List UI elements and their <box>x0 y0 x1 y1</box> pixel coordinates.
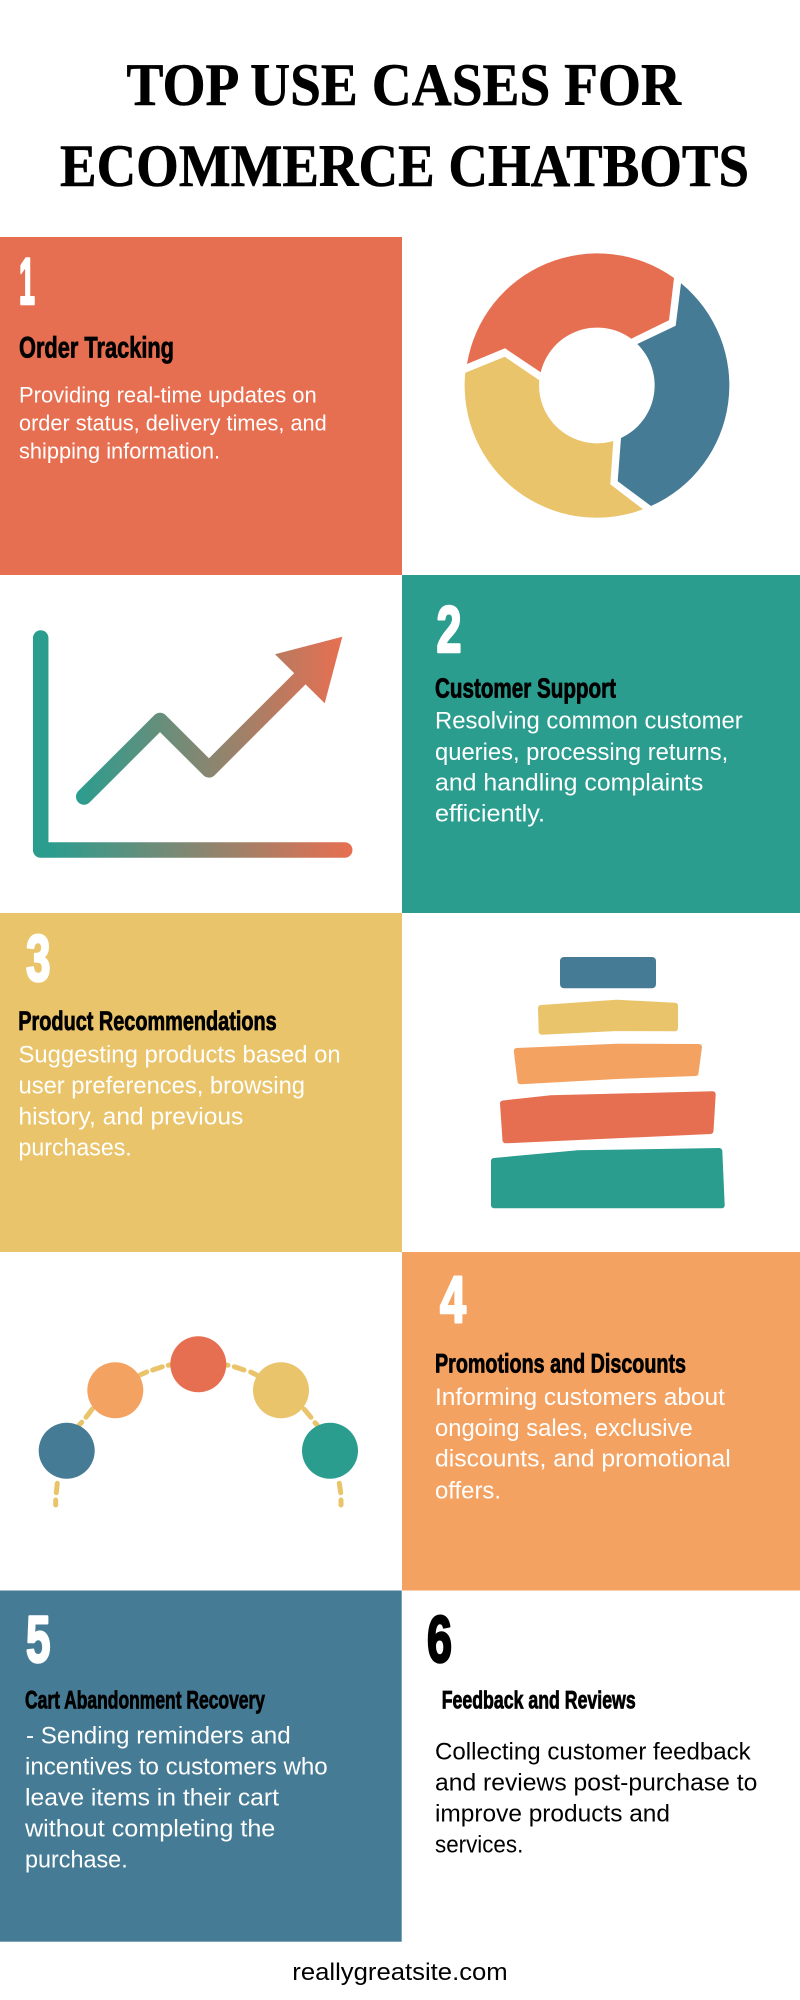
panel: 3 product recommendations: Product Recommendations <box>18 1006 277 1036</box>
panel: 2 customer support: 2 <box>436 592 462 666</box>
panel: 1 order tracking <box>0 237 402 575</box>
title <box>60 52 749 199</box>
panel: 6 feedback and reviews <box>427 1602 757 1859</box>
panel: 4 promotions and discounts: offers. <box>435 1477 501 1504</box>
panel: 6 feedback and reviews: improve products and <box>435 1800 670 1827</box>
panel: 5 cart abandonment recovery: purchase. <box>25 1847 128 1874</box>
panel: 4 promotions and discounts: 4 <box>440 1262 466 1336</box>
panel: 3 product recommendations: user preferences, browsing <box>18 1073 305 1100</box>
panel: 5 cart abandonment recovery: 5 <box>26 1602 50 1676</box>
panel: 6 feedback and reviews: Feedback and Reviews <box>442 1686 636 1714</box>
panel: 4 promotions and discounts: Informing customers about <box>435 1384 725 1411</box>
panel: 5 cart abandonment recovery <box>0 1590 402 1942</box>
panel: 1 order tracking: order status, delivery times, and <box>19 411 327 436</box>
panel: 3 product recommendations: 3 <box>26 921 50 995</box>
icon: growth line chart with arrow <box>41 637 345 850</box>
panel: 5 cart abandonment recovery: - Sending reminders and <box>26 1722 291 1749</box>
icon: stacked pyramid of blocks <box>494 957 722 1205</box>
panel: 1 order tracking: shipping information. <box>19 439 220 464</box>
panel: 2 customer support: and handling complaints <box>435 770 703 797</box>
panel: 2 customer support: efficiently. <box>435 801 545 828</box>
panel: 1 order tracking: Order Tracking <box>19 331 174 364</box>
icon: cycle donut chart <box>465 253 729 518</box>
icon: arc of connected dots <box>39 1336 358 1505</box>
panel: 3 product recommendations: history, and previous <box>18 1103 243 1130</box>
panel: 1 order tracking: 1 <box>19 244 35 318</box>
panel: 3 product recommendations <box>0 913 402 1252</box>
panel: 4 promotions and discounts: discounts, and promotional <box>435 1446 731 1473</box>
title: ECOMMERCE CHATBOTS <box>60 133 749 199</box>
panel: 2 customer support: queries, processing returns, <box>435 739 728 766</box>
panel: 3 product recommendations: purchases. <box>18 1135 132 1162</box>
panel: 6 feedback and reviews: services. <box>435 1832 523 1859</box>
panel: 2 customer support: Resolving common customer <box>435 707 743 734</box>
panel: 2 customer support: Customer Support <box>435 672 616 703</box>
title: TOP USE CASES FOR <box>126 52 682 118</box>
panel: 4 promotions and discounts: ongoing sales, exclusive <box>435 1415 693 1442</box>
panel: 5 cart abandonment recovery: without completing the <box>24 1816 275 1843</box>
panel: 6 feedback and reviews: and reviews post-purchase to <box>435 1770 757 1797</box>
panel: 4 promotions and discounts <box>402 1252 800 1590</box>
footer website: reallygreatsite.com <box>292 1959 508 1986</box>
panel: 4 promotions and discounts: Promotions and Discounts <box>435 1349 686 1379</box>
panel: 1 order tracking: Providing real-time updates on <box>19 383 317 408</box>
panel: 5 cart abandonment recovery: leave items in their cart <box>25 1785 279 1812</box>
panel: 6 feedback and reviews: Collecting customer feedback <box>435 1738 751 1765</box>
panel: 6 feedback and reviews: 6 <box>427 1602 452 1676</box>
panel: 2 customer support <box>402 575 800 913</box>
panel: 5 cart abandonment recovery: incentives to customers who <box>25 1753 328 1780</box>
panel: 3 product recommendations: Suggesting products based on <box>18 1041 341 1068</box>
panel: 5 cart abandonment recovery: Cart Abandonment Recovery <box>25 1686 265 1714</box>
